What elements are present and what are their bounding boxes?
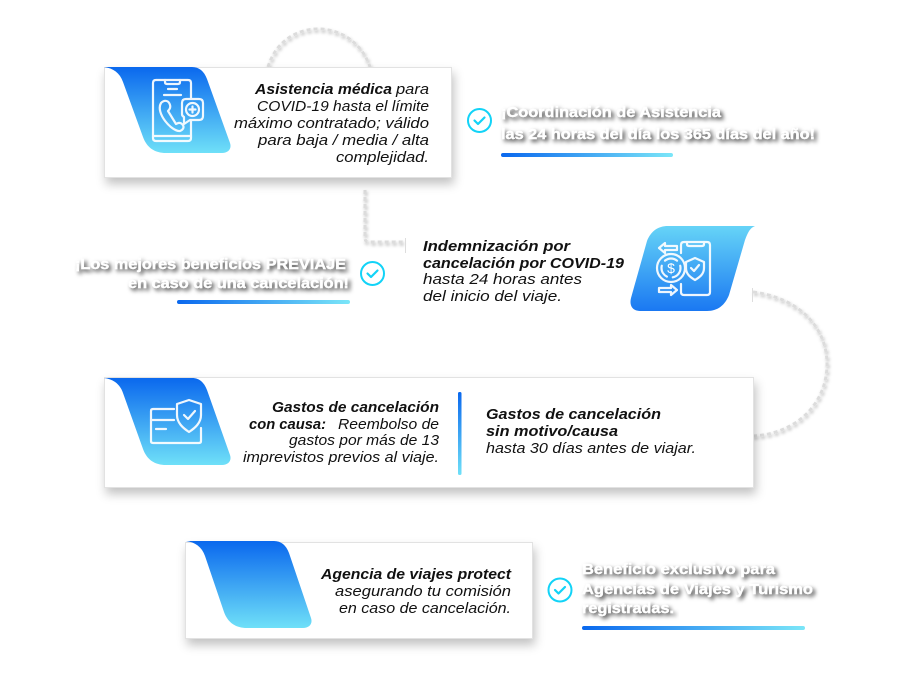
text: indemnización: hasta 24 horas antes	[423, 272, 582, 288]
text: gastos con causa: con causa:	[249, 417, 326, 433]
text: gastos sin motivo: Gastos de cancelación	[486, 407, 661, 423]
text: asistencia médica: para baja / media / alta	[257, 133, 429, 149]
connector: right arc	[753, 292, 827, 436]
text: asistencia médica: Asistencia médica	[254, 82, 392, 98]
text: gastos con causa: gastos por más de 13	[289, 433, 439, 449]
label: dollar sign: $	[667, 260, 675, 276]
connector tick: elbow end	[405, 238, 406, 253]
text: indemnización	[423, 239, 624, 305]
panel: agencia de viajes	[186, 541, 532, 638]
text: asistencia médica: máximo contratado; válido	[234, 116, 429, 132]
icon panel: blue tab with card and shield	[104, 378, 231, 465]
icon: check circle	[468, 109, 491, 132]
text: agencia protect	[320, 567, 512, 617]
text: gastos con causa: Gastos de cancelación	[272, 400, 439, 416]
connector tick: arc end	[752, 288, 753, 302]
text: gastos con causa: imprevistos previos al viaje.	[243, 450, 439, 466]
icon: check circle	[548, 578, 572, 602]
panel: indemnización	[423, 226, 755, 311]
connector: top arc	[268, 29, 370, 67]
text: asistencia médica: COVID-19 hasta el límite	[257, 99, 429, 115]
icon: card with shield	[151, 400, 201, 443]
text: indemnización: Indemnización por	[423, 239, 572, 255]
callout: beneficio exclusivo: Beneficio exclusivo para	[582, 561, 776, 578]
icon panel: blue tab with transfer	[630, 226, 755, 311]
text: gastos sin motivo: hasta 30 días antes de viajar.	[486, 441, 696, 457]
callout: beneficios previaje: ¡Los mejores beneficios PREVIAJE	[75, 256, 346, 273]
text: gastos con causa: Reembolso de	[338, 417, 439, 433]
icon: phone, coin and arrows	[657, 242, 710, 295]
text: indemnización: del inicio del viaje.	[423, 289, 562, 305]
text: asistencia médica: para	[395, 82, 429, 98]
blue tab	[186, 541, 312, 628]
callout: beneficio exclusivo	[548, 561, 813, 630]
icon: phone with medical call	[153, 80, 203, 141]
icon panel: blue tab with phone	[104, 67, 231, 153]
callout: beneficio exclusivo: Agencias de Viajes y Turismo	[582, 581, 813, 598]
text: agencia protect: Agencia de viajes protect	[320, 567, 512, 583]
icon: check circle	[361, 262, 384, 285]
text: asistencia médica: complejidad.	[336, 150, 429, 166]
text: agencia protect: asegurando tu comisión	[335, 584, 511, 600]
callout: beneficios previaje	[75, 256, 384, 304]
text: indemnización: cancelación por COVID-19	[423, 256, 624, 272]
callout: coordinación de asistencia: las 24 horas del día los 365 días del año!	[501, 126, 815, 143]
callout: coordinación de asistencia: ¡Coordinación de Asistencia	[501, 104, 722, 121]
panel: gastos de cancelación	[104, 378, 754, 488]
text: gastos con causa	[243, 400, 439, 466]
panel: asistencia médica	[104, 67, 452, 178]
divider: gradient bar	[458, 392, 462, 475]
callout: beneficio exclusivo: registradas.	[582, 600, 674, 617]
callout: beneficios previaje: en caso de una cancelación!	[128, 275, 349, 292]
text: asistencia médica	[234, 82, 429, 166]
text: agencia protect: en caso de cancelación.	[339, 601, 511, 617]
callout: coordinación de asistencia	[468, 104, 815, 157]
text: gastos sin motivo	[486, 407, 696, 457]
connector: elbow between first and second block	[365, 190, 403, 242]
text: gastos sin motivo: sin motivo/causa	[486, 424, 618, 440]
